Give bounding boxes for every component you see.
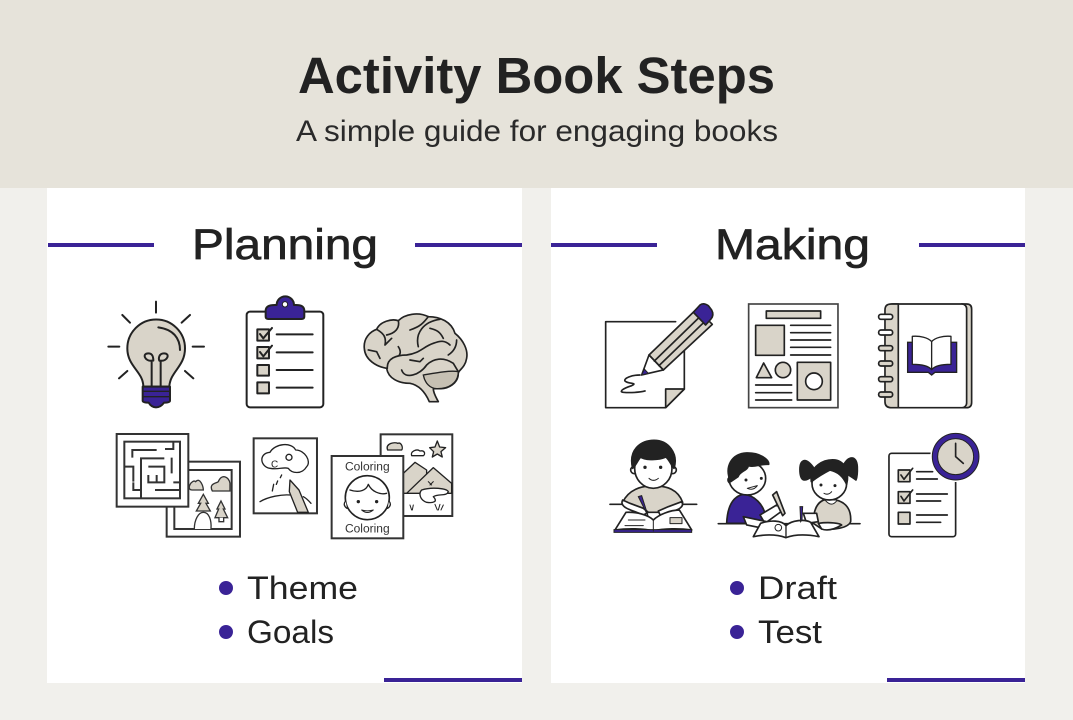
icon: light bulb bbox=[108, 302, 204, 407]
icon: pencil drawing on page bbox=[606, 304, 713, 408]
icon: landscape colouring page bbox=[381, 434, 452, 516]
icon: maze and forest pages bbox=[117, 434, 240, 537]
icon: clipboard checklist bbox=[247, 296, 323, 407]
icon: coloring page with face: Coloring bbox=[345, 459, 390, 473]
heading: making: Making bbox=[715, 221, 870, 269]
icon: checklist with clock bbox=[889, 431, 981, 537]
icon: coloring page with face bbox=[332, 456, 403, 538]
title: Activity Book Steps bbox=[298, 47, 775, 104]
icon: layout sheet bbox=[749, 304, 838, 408]
list: making: Test bbox=[758, 614, 822, 650]
header band bbox=[0, 0, 1073, 188]
heading: planning: Planning bbox=[192, 221, 378, 269]
panel: planning bbox=[47, 188, 522, 683]
list: planning: Theme bbox=[247, 570, 358, 606]
icon: drawing page bbox=[254, 438, 317, 513]
list: planning bbox=[219, 570, 358, 650]
list: planning: Goals bbox=[247, 614, 334, 650]
icon: spiral notebook bbox=[879, 304, 972, 408]
icon: drawing page: C bbox=[271, 460, 278, 471]
subtitle: A simple guide for engaging books bbox=[296, 115, 778, 148]
icon: two children sharing a book bbox=[718, 453, 860, 538]
icon: brain bbox=[364, 314, 467, 402]
icon: coloring page with face: Coloring bbox=[345, 521, 390, 535]
list: making: Draft bbox=[758, 570, 837, 606]
panel: making bbox=[551, 188, 1025, 683]
list: making bbox=[730, 570, 837, 650]
icon: child writing bbox=[610, 440, 697, 532]
